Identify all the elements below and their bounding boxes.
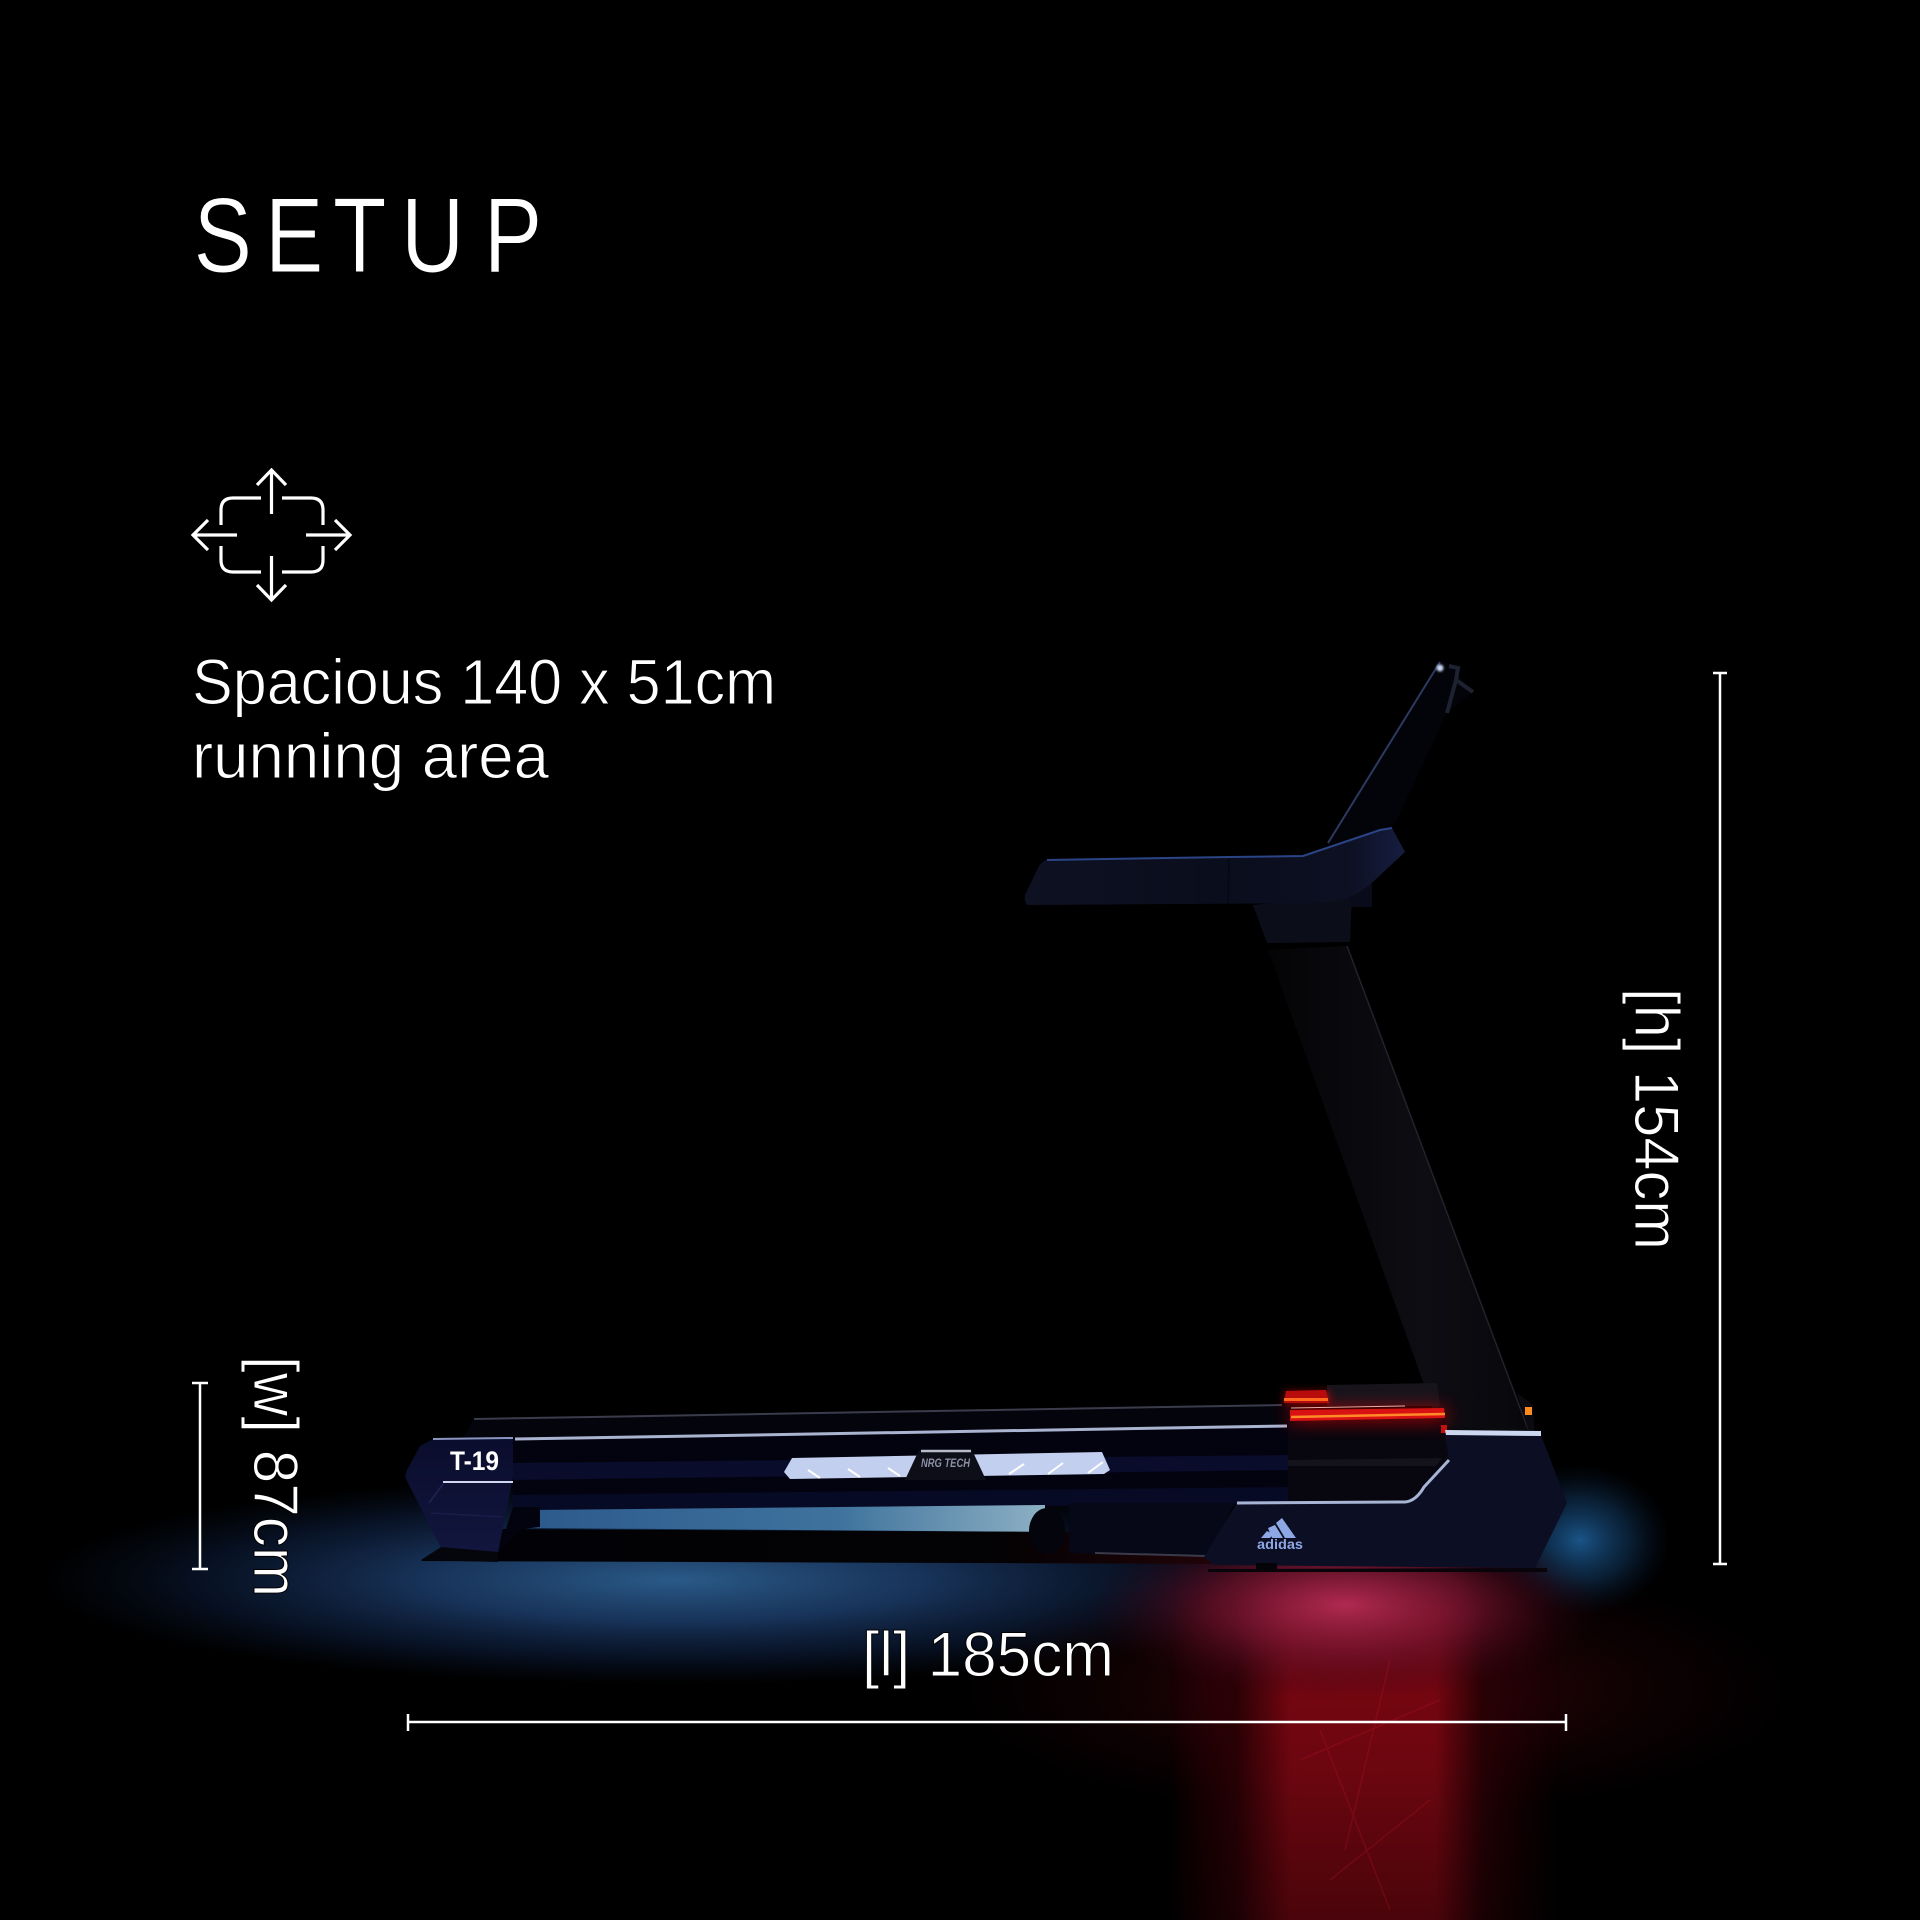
collar — [1253, 895, 1352, 943]
upper rail — [462, 1404, 1290, 1440]
center block — [1288, 1418, 1449, 1504]
width bar — [192, 1383, 208, 1569]
deck body — [513, 1425, 1290, 1510]
height dimension — [1621, 673, 1727, 1564]
blue glow right of the base — [1490, 1465, 1670, 1615]
upright post — [1268, 946, 1535, 1436]
deck blue band — [513, 1455, 1290, 1480]
description text — [192, 646, 776, 792]
side plate — [784, 1452, 1110, 1479]
wide red glow — [950, 1560, 1800, 1820]
floor lighting — [40, 1465, 1800, 1920]
NRG TECH badge: NRG TECH — [921, 1456, 970, 1470]
NRG TECH badge — [905, 1450, 986, 1480]
length bar — [408, 1714, 1566, 1731]
shadow under the deck — [421, 1529, 1240, 1564]
pink glow under the base — [1090, 1510, 1600, 1700]
title: SETUP — [194, 175, 542, 295]
blue floor glow — [40, 1475, 1310, 1685]
handlebar — [1025, 828, 1405, 905]
lit floor under the deck — [531, 1505, 1045, 1532]
width dimension — [192, 1356, 310, 1597]
width label: [w] 87cm — [240, 1356, 310, 1597]
running deck — [462, 1404, 1290, 1510]
T-19 badge: T-19 — [450, 1446, 499, 1476]
floor scratches — [1300, 1660, 1440, 1910]
adidas logo — [1257, 1518, 1303, 1552]
front cap — [405, 1438, 540, 1562]
wheel assembly — [1029, 1503, 1235, 1556]
post behind handlebar — [1350, 870, 1372, 907]
length dimension — [408, 1620, 1566, 1731]
adidas logo: adidas — [1257, 1536, 1303, 1552]
treadmill — [405, 660, 1567, 1572]
red lights — [1284, 1390, 1532, 1433]
rear base — [1204, 1430, 1567, 1572]
description text: running area — [192, 720, 549, 792]
deck highlight stripe — [515, 1426, 1287, 1439]
red column reflection — [1182, 1573, 1537, 1920]
rear dark panel — [1327, 1383, 1440, 1406]
icon: expand arrows — [193, 470, 350, 600]
height bar — [1713, 673, 1727, 1564]
description text: Spacious 140 x 51cm — [192, 646, 776, 718]
console — [1328, 660, 1473, 845]
height label: [h] 154cm — [1621, 988, 1691, 1250]
length label: [l] 185cm — [862, 1620, 1114, 1690]
